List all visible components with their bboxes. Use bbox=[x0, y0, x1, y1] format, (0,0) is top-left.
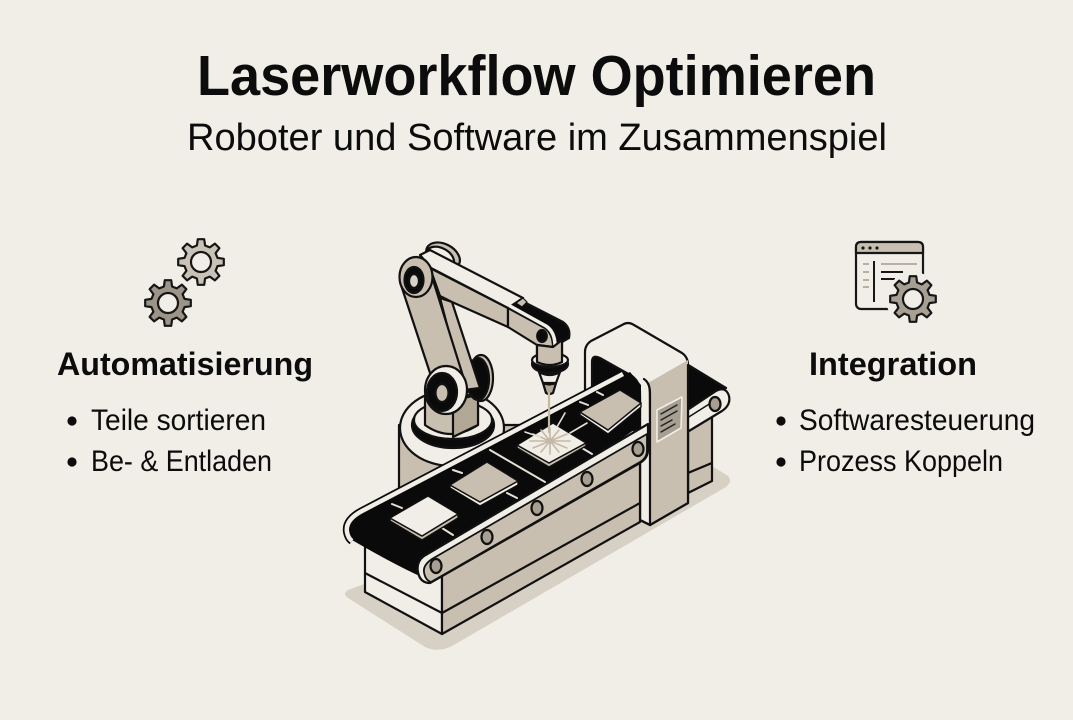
robot small dark link bbox=[438, 292, 452, 313]
list: Integration: Softwaresteuerung bbox=[799, 404, 1035, 437]
list: Automatisierung bbox=[67, 404, 272, 478]
robot upper arm bbox=[420, 250, 569, 347]
gantry opening bbox=[592, 354, 642, 430]
front rail with rollers bbox=[418, 424, 648, 583]
laser head bbox=[532, 340, 568, 394]
robot lower arm bbox=[400, 280, 480, 392]
laser beam and sparks bbox=[525, 393, 587, 454]
list: Integration bbox=[776, 404, 1035, 478]
conveyor belt bbox=[349, 372, 641, 578]
workpiece 3 under laser bbox=[517, 423, 586, 467]
workpiece 1 bbox=[390, 496, 458, 540]
list: Automatisierung: Teile sortieren bbox=[91, 404, 266, 437]
heading: Automatisierung: Automatisierung bbox=[57, 346, 313, 382]
rear conveyor legs bbox=[688, 405, 712, 493]
icon: two gears bbox=[145, 239, 224, 326]
ground shadow bbox=[345, 466, 730, 650]
gantry tower bbox=[585, 323, 688, 525]
gantry label plate bbox=[657, 397, 682, 442]
conveyor base right face bbox=[442, 460, 640, 634]
robot base bbox=[399, 390, 520, 490]
illustration: robot arm and laser conveyor bbox=[345, 237, 730, 650]
icon: software window with gear bbox=[856, 242, 940, 326]
workpiece 2 bbox=[450, 462, 518, 506]
lower robot joint bbox=[425, 366, 467, 414]
robot rear elbow disc bbox=[467, 355, 493, 401]
robot upper joint bbox=[400, 257, 432, 297]
title: Laserworkflow Optimieren bbox=[197, 44, 876, 108]
belt tick marks bbox=[392, 392, 603, 535]
rear rail bbox=[347, 374, 623, 541]
subtitle: Roboter und Software im Zusammenspiel bbox=[187, 117, 887, 159]
list: Integration: Prozess Koppeln bbox=[799, 445, 1003, 478]
workpiece 4 bbox=[580, 390, 641, 434]
list: Automatisierung: Be- & Entladen bbox=[91, 445, 272, 478]
heading: Integration: Integration bbox=[809, 346, 977, 382]
rear belt section bbox=[680, 360, 729, 434]
conveyor base left face bbox=[365, 545, 442, 634]
robot upper joint rear disc bbox=[421, 237, 465, 275]
